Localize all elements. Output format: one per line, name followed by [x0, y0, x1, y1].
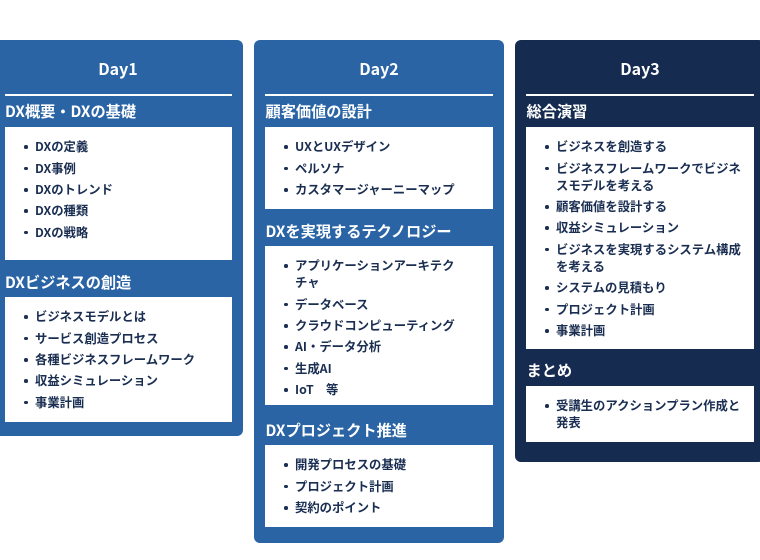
heading: Day1: Day1 — [98, 56, 138, 80]
list box: 顧客価値の設計 — [265, 127, 493, 209]
panel: Day2 — [254, 40, 504, 543]
list box: 総合演習: 顧客価値を設計する — [556, 197, 667, 215]
divider: Day1 — [5, 94, 232, 96]
list box: DXを実現するテクノロジー: データベース — [295, 295, 368, 313]
list box: 総合演習: を考える — [556, 257, 605, 275]
list box: まとめ: 受講生のアクションプラン作成と — [556, 396, 740, 414]
list box: DX概要: DXの定義 — [35, 137, 88, 155]
list box: DXを実現するテクノロジー — [265, 246, 493, 405]
list box: DXビジネスの創造: 収益シミュレーション — [35, 371, 158, 389]
list box: 顧客価値の設計: ペルソナ — [295, 159, 344, 177]
heading: DXプロジェクト推進: DXプロジェクト推進 — [266, 419, 407, 441]
list box: DXビジネスの創造: サービス創造プロセス — [35, 329, 158, 347]
list box: 顧客価値の設計: UXとUXデザイン — [295, 137, 390, 155]
heading: DXビジネスの創造: DXビジネスの創造 — [5, 271, 131, 293]
list box: 総合演習: ビジネスを創造する — [556, 137, 667, 155]
list box: DX概要: DXのトレンド — [35, 180, 113, 198]
list box: DX概要: DXの種類 — [35, 201, 88, 219]
list box: まとめ: 発表 — [556, 413, 581, 431]
list box: DXビジネスの創造: ビジネスモデルとは — [35, 307, 146, 325]
heading: 総合演習: 総合演習 — [526, 100, 587, 122]
list box: 総合演習 — [526, 127, 754, 349]
list box: 顧客価値の設計: カスタマージャーニーマップ — [295, 180, 455, 198]
heading: Day3: Day3 — [620, 56, 660, 80]
heading: DXを実現するテクノロジー: DXを実現するテクノロジー — [266, 220, 452, 242]
list box: DX概要 — [5, 127, 232, 260]
divider: Day2 — [265, 94, 493, 96]
list box: DXを実現するテクノロジー: 生成AI — [295, 359, 332, 377]
list box: 総合演習: ビジネスを実現するシステム構成 — [556, 240, 741, 258]
list box: DXプロジェクト推進: 開発プロセスの基礎 — [295, 455, 406, 473]
list box: DX概要: DX事例 — [35, 159, 76, 177]
heading: 顧客価値の設計: 顧客価値の設計 — [266, 100, 372, 122]
list box: DXを実現するテクノロジー: チャ — [295, 273, 320, 291]
heading: DX概要・DXの基礎: DX概要・DXの基礎 — [5, 100, 136, 122]
panel: Day3 — [515, 40, 760, 462]
list box: 総合演習: スモデルを考える — [556, 176, 654, 194]
list box: DXプロジェクト推進 — [265, 445, 493, 527]
list box: まとめ — [526, 386, 754, 442]
list box: DXを実現するテクノロジー: AI・データ分析 — [295, 337, 381, 355]
list box: DXプロジェクト推進: 契約のポイント — [295, 498, 381, 516]
list box: DXを実現するテクノロジー: クラウドコンピューティング — [295, 316, 455, 334]
list box: 総合演習: 収益シミュレーション — [556, 218, 679, 236]
heading: まとめ: まとめ — [526, 359, 572, 381]
list box: 総合演習: 事業計画 — [556, 321, 605, 339]
panel: Day1 — [0, 40, 243, 436]
list box: 総合演習: プロジェクト計画 — [556, 300, 655, 318]
list box: 総合演習: システムの見積もり — [556, 278, 667, 296]
list box: DX概要: DXの戦略 — [35, 223, 88, 241]
list box: DXビジネスの創造 — [5, 297, 232, 422]
heading: Day2: Day2 — [359, 56, 399, 80]
list box: DXを実現するテクノロジー: アプリケーションアーキテク — [295, 256, 454, 274]
list box: 総合演習: ビジネスフレームワークでビジネ — [556, 159, 741, 177]
divider: Day3 — [526, 94, 754, 96]
list box: DXビジネスの創造: 事業計画 — [35, 393, 84, 411]
list box: DXプロジェクト推進: プロジェクト計画 — [295, 477, 394, 495]
list box: DXビジネスの創造: 各種ビジネスフレームワーク — [35, 350, 195, 368]
list box: DXを実現するテクノロジー: IoT 等 — [295, 380, 338, 398]
